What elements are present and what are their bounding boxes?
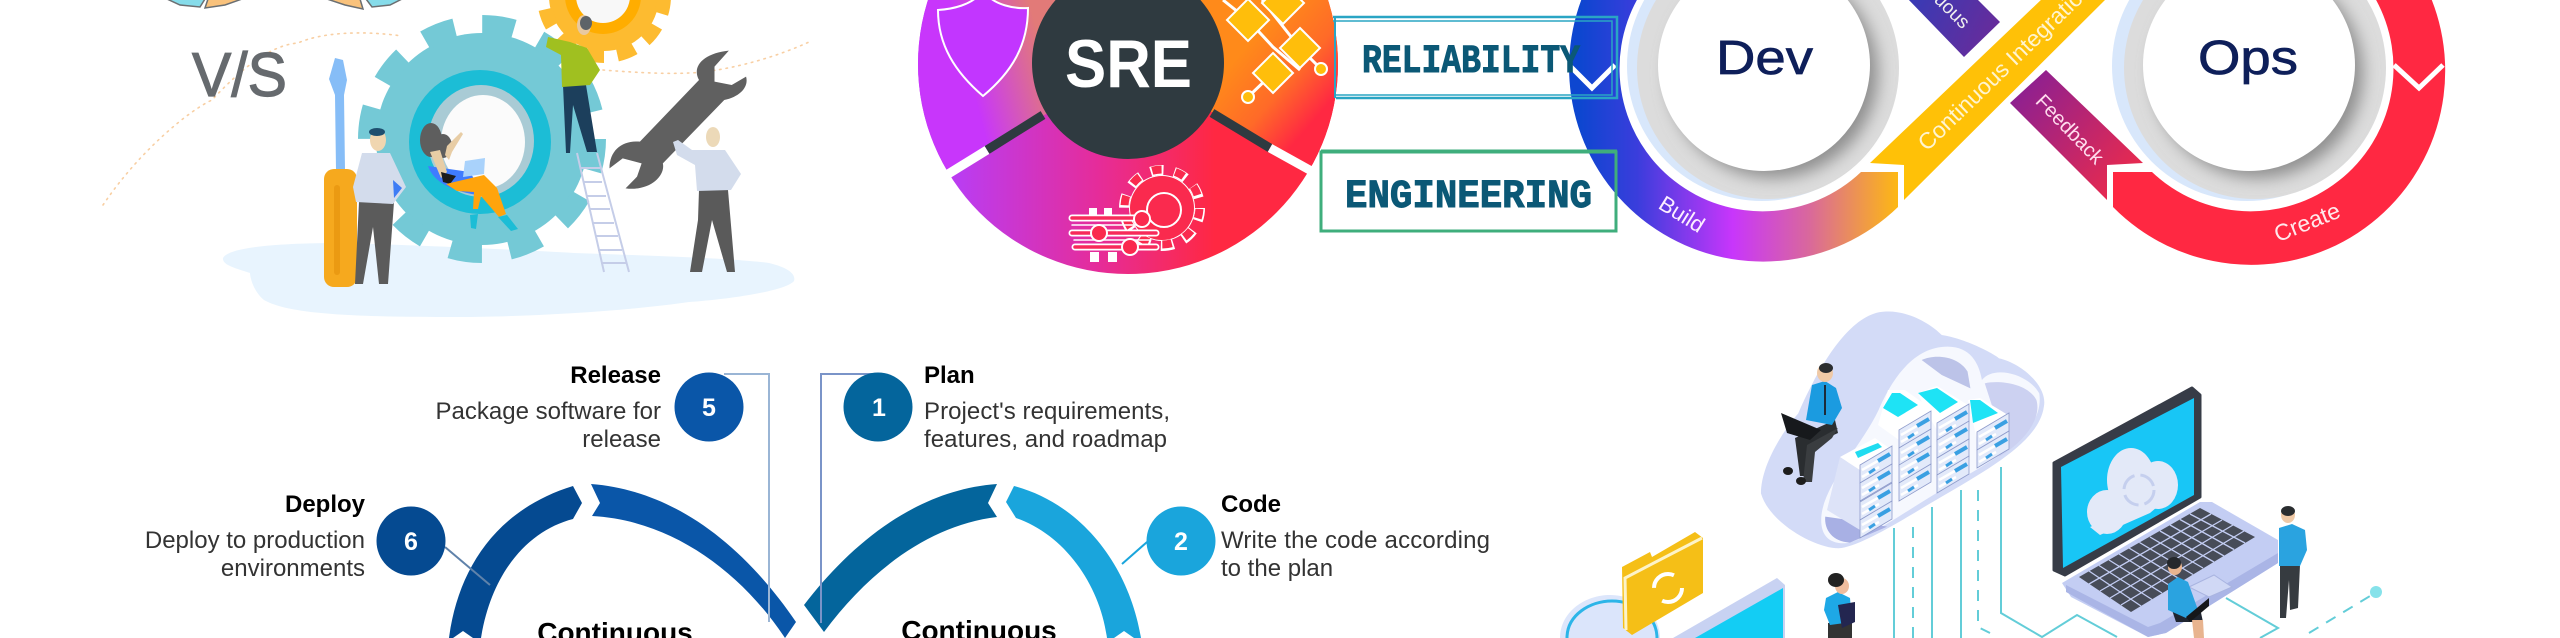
- panel: cloud computing illustration: [1560, 312, 2382, 638]
- step 1: plan: features, and roadmap: [924, 426, 1167, 453]
- disk: [1560, 595, 1660, 638]
- Dev ring band: [1569, 0, 1898, 262]
- separator notches: [453, 631, 1134, 638]
- laptop: [2054, 388, 2278, 637]
- Ops hub: Ops: [2198, 32, 2298, 85]
- arc: plan: [804, 484, 997, 632]
- step 6: deploy: environments: [221, 555, 365, 582]
- Continuous delivery band: [1891, 0, 2000, 57]
- figure: woman with laptop: [420, 123, 518, 231]
- Continuous integration band: [1870, 0, 2107, 200]
- connector: release: [724, 374, 769, 622]
- step 6: deploy: Deploy: [285, 491, 366, 518]
- connector: deploy: [445, 547, 490, 585]
- panel: SRE vs DevOps illustration: [103, 0, 809, 317]
- step 2: code: Write the code according: [1221, 527, 1490, 554]
- panel: reliability engineering labels: [1321, 17, 1617, 231]
- Dev hub: [1627, 0, 1899, 201]
- RELIABILITY box: [1333, 17, 1617, 98]
- step 5: release: 5: [702, 394, 716, 422]
- Create label: Create: [2270, 197, 2344, 247]
- step 2: code: 2: [1174, 528, 1188, 556]
- panel: SRE wheel: [918, 0, 1338, 274]
- dotted path: [103, 33, 809, 205]
- step 1: plan: Plan: [924, 362, 975, 389]
- icon: screwdriver: [324, 58, 357, 287]
- step 2: code: [1146, 491, 1490, 582]
- end dot: [2370, 586, 2382, 598]
- arc: code: [1006, 486, 1141, 638]
- panel: DevOps infinity loop: [1569, 0, 2445, 265]
- orange gear: [544, 0, 664, 56]
- dividers: [940, 113, 1315, 179]
- Build label: Build: [1655, 191, 1709, 238]
- large teal gear: [368, 25, 596, 253]
- Ops hub: [2112, 0, 2386, 201]
- icon: shield: [938, 0, 1028, 96]
- monitor: [1673, 578, 1785, 638]
- step 6: deploy: [145, 491, 446, 582]
- step 5: release: [436, 362, 744, 453]
- step 2: code: Code: [1221, 491, 1281, 518]
- Ops chevron: [2394, 65, 2443, 88]
- arc: deploy: [449, 486, 582, 638]
- arc: release: [591, 484, 796, 638]
- connector: plan: [821, 374, 872, 623]
- disk rim: [1567, 601, 1657, 638]
- network lines: [1894, 467, 2375, 638]
- step 1: plan: Project's requirements,: [924, 398, 1170, 425]
- figure: man in green on ladder: [546, 15, 600, 153]
- Feedback band: Feedback: [2031, 90, 2108, 170]
- step 1: plan: [844, 362, 1170, 453]
- step 6: deploy: Deploy to production: [145, 527, 365, 554]
- figure: woman with notebook: [1824, 573, 1855, 638]
- figure: man at right: [673, 127, 741, 272]
- step 1: plan: 1: [872, 394, 886, 422]
- figure: person on cloud: [1781, 363, 1842, 485]
- Dev chevron: [1569, 65, 1615, 88]
- cloud: [1761, 312, 2044, 548]
- top logo fragments: [167, 0, 402, 9]
- V/S label: V/S: [192, 41, 287, 110]
- SRE label: SRE: [1065, 26, 1192, 102]
- ENGINEERING box: [1321, 150, 1617, 231]
- step 6: deploy: 6: [404, 528, 418, 556]
- center disc: [1032, 0, 1224, 159]
- step 5: release: Package software for: [436, 398, 661, 425]
- step 5: release: release: [582, 426, 661, 453]
- icon: wrench: [609, 51, 747, 189]
- RELIABILITY box: RELIABILITY: [1362, 40, 1580, 85]
- panel: continuous delivery lifecycle: [145, 362, 1490, 638]
- ENGINEERING box: ENGINEERING: [1345, 175, 1592, 220]
- figure: man at left: [353, 128, 406, 284]
- Ops ring band: [2113, 0, 2445, 265]
- figure: standing person right: [2279, 506, 2307, 618]
- icon: flow diagram: [1223, 0, 1327, 103]
- Dev hub: Dev: [1716, 32, 1813, 85]
- icon: gears: [1072, 170, 1200, 262]
- ladder: [577, 153, 629, 272]
- figure: seated person on laptop: [2167, 557, 2209, 638]
- wheel sectors: [918, 0, 1338, 274]
- step 5: release: Release: [570, 362, 661, 389]
- icon: folder: [1622, 532, 1703, 635]
- connector: code: [1122, 542, 1147, 564]
- Feedback band: [2010, 70, 2143, 200]
- server racks: [1827, 386, 2009, 538]
- ground blob: [223, 243, 794, 317]
- step 2: code: to the plan: [1221, 555, 1333, 582]
